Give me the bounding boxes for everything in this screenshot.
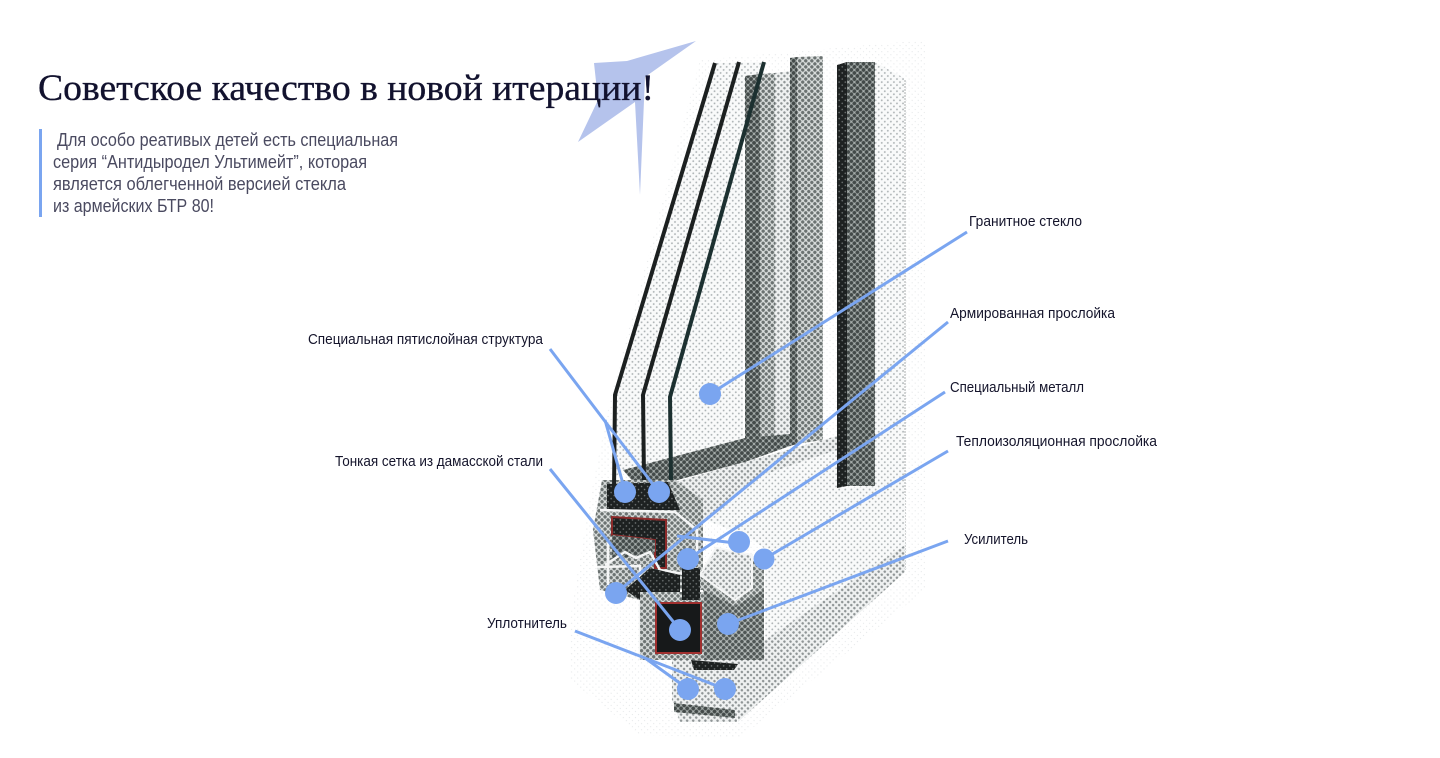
sill: lower edge	[735, 545, 905, 722]
glass spacer lines	[614, 62, 764, 490]
callout: Гранитное стекло: Гранитное стекло	[969, 213, 1082, 230]
callout: Специальная пятислойная структура	[308, 331, 670, 503]
profile: lower block	[640, 560, 764, 660]
accent bar	[39, 129, 42, 217]
profile: upper right wedge	[700, 548, 752, 600]
text block: description: серия “Антидыродел Ультимейт”, которая	[53, 152, 367, 172]
callout: Специальная пятислойная структура: Специальная пятислойная структура	[308, 331, 544, 348]
profile: glazing chamber	[607, 482, 680, 510]
callout: Тонкая сетка из дамасской стали	[335, 453, 691, 641]
callout: Специальный металл: Специальный металл	[950, 379, 1084, 396]
title: Советское качество в новой итерации!	[38, 68, 654, 109]
callout: Усилитель	[717, 531, 1028, 635]
sill: front white face	[765, 495, 905, 640]
text block: description: является облегченной версией стекла	[53, 174, 347, 194]
callout: Уплотнитель: Уплотнитель	[487, 615, 567, 632]
profile: bottom dark slots	[691, 660, 738, 670]
profile: upper block	[593, 480, 703, 600]
profile: reinforcement steel	[656, 603, 701, 653]
profile: red-lined chamber	[612, 517, 666, 568]
text block: description: из армейских БТР 80!	[53, 196, 214, 216]
profile: bottom block	[672, 660, 764, 722]
profile: white ribs	[597, 510, 697, 660]
callout: Уплотнитель	[487, 615, 736, 700]
callout: Специальный металл	[677, 379, 1084, 570]
callout: Армированная прослойка: Армированная прослойка	[950, 305, 1116, 322]
halo around window	[570, 40, 925, 738]
profile: right chamber	[704, 590, 764, 660]
text block: description: Для особо реативых детей есть специальная	[57, 130, 398, 150]
sill: light face	[705, 450, 875, 552]
callout: Усилитель: Усилитель	[964, 531, 1028, 548]
profile: foot	[674, 703, 735, 718]
sill: dark band	[623, 434, 790, 490]
callout: Армированная прослойка	[605, 305, 1116, 604]
callout: Теплоизоляционная прослойка: Теплоизоляционная прослойка	[956, 433, 1158, 450]
sill: grey upper face	[672, 436, 837, 520]
profile: dark chamber	[682, 568, 700, 600]
profile frame top edge and bands	[745, 56, 905, 570]
window cross-section illustration	[570, 40, 925, 738]
profile: chamber interior	[612, 535, 655, 560]
profile: lower chamber dark	[625, 568, 680, 600]
callout: Тонкая сетка из дамасской стали: Тонкая сетка из дамасской стали	[335, 453, 543, 470]
callout: Теплоизоляционная прослойка	[754, 433, 1158, 570]
text block: description	[39, 129, 398, 217]
callout: Гранитное стекло	[699, 213, 1082, 405]
icon: decorative star shape	[578, 41, 696, 195]
glass panes	[612, 62, 764, 480]
